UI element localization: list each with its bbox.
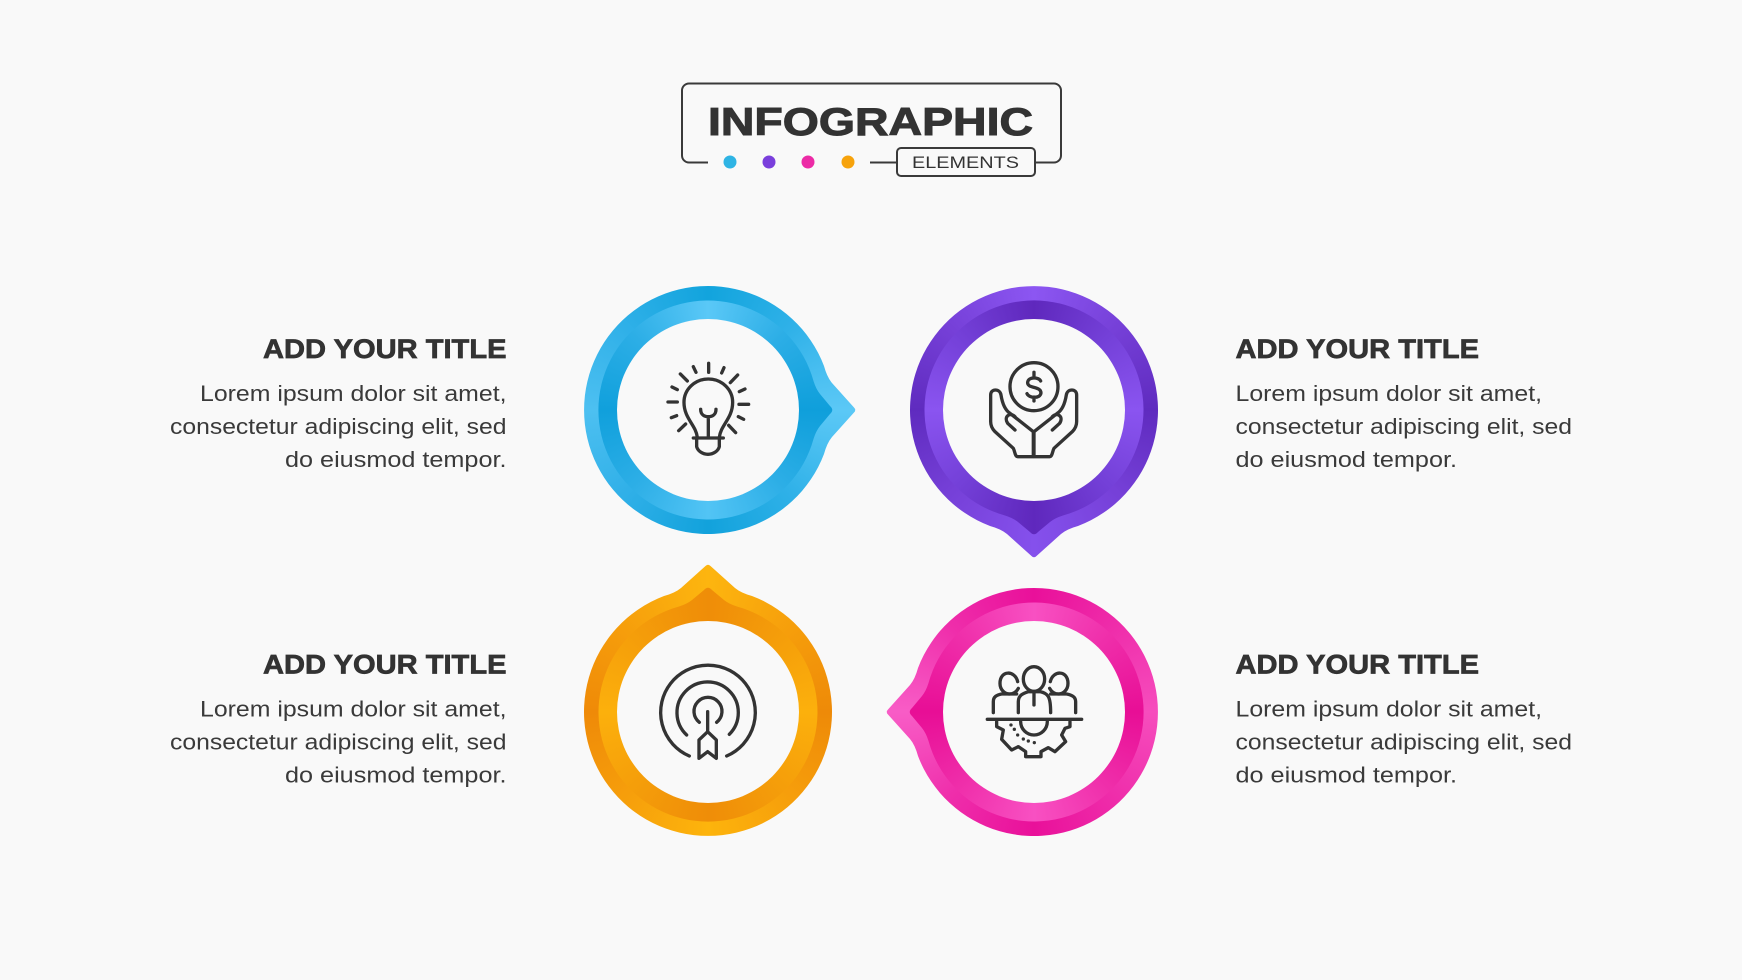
heading: ADD YOUR TITLE xyxy=(1236,650,1479,680)
body copy: do eiusmod tempor. xyxy=(1236,762,1457,788)
panel: blue lightbulb circle xyxy=(584,286,856,534)
panel: purple money circle xyxy=(910,286,1158,558)
text block: bottom left xyxy=(170,650,506,788)
text block: bottom right xyxy=(1236,650,1572,788)
body copy xyxy=(170,696,506,788)
subtitle box: ELEMENTS: ELEMENTS xyxy=(912,153,1019,172)
header frame xyxy=(682,84,1061,162)
body copy: consectetur adipiscing elit, sed xyxy=(170,730,506,754)
text block: top left xyxy=(170,334,506,472)
icon: target with arrow xyxy=(659,664,757,760)
body copy: Lorem ipsum dolor sit amet, xyxy=(1236,381,1542,406)
color dots xyxy=(724,156,854,168)
body copy xyxy=(1236,696,1572,788)
title: INFOGRAPHIC: INFOGRAPHIC xyxy=(708,101,1033,144)
heading: ADD YOUR TITLE xyxy=(263,650,506,680)
icon: team on gear xyxy=(986,665,1084,758)
body copy: consectetur adipiscing elit, sed xyxy=(1236,414,1572,439)
heading: ADD YOUR TITLE xyxy=(263,334,506,364)
body copy: Lorem ipsum dolor sit amet, xyxy=(200,381,506,406)
panel: orange target circle xyxy=(584,564,832,836)
body copy: Lorem ipsum dolor sit amet, xyxy=(200,696,506,722)
panel: pink team circle xyxy=(886,588,1158,836)
body copy: do eiusmod tempor. xyxy=(1236,447,1457,472)
heading: ADD YOUR TITLE xyxy=(1236,334,1479,364)
icon: hands holding coin xyxy=(989,361,1078,458)
subtitle box: ELEMENTS xyxy=(897,148,1035,176)
text block: top right xyxy=(1236,334,1572,472)
body copy xyxy=(170,381,506,472)
body copy xyxy=(1236,381,1572,472)
header badge xyxy=(681,82,1062,177)
body copy: Lorem ipsum dolor sit amet, xyxy=(1236,696,1542,722)
body copy: consectetur adipiscing elit, sed xyxy=(1236,730,1572,754)
body copy: do eiusmod tempor. xyxy=(285,447,506,472)
body copy: do eiusmod tempor. xyxy=(285,762,506,788)
body copy: consectetur adipiscing elit, sed xyxy=(170,414,506,439)
icon: lightbulb xyxy=(666,362,750,456)
